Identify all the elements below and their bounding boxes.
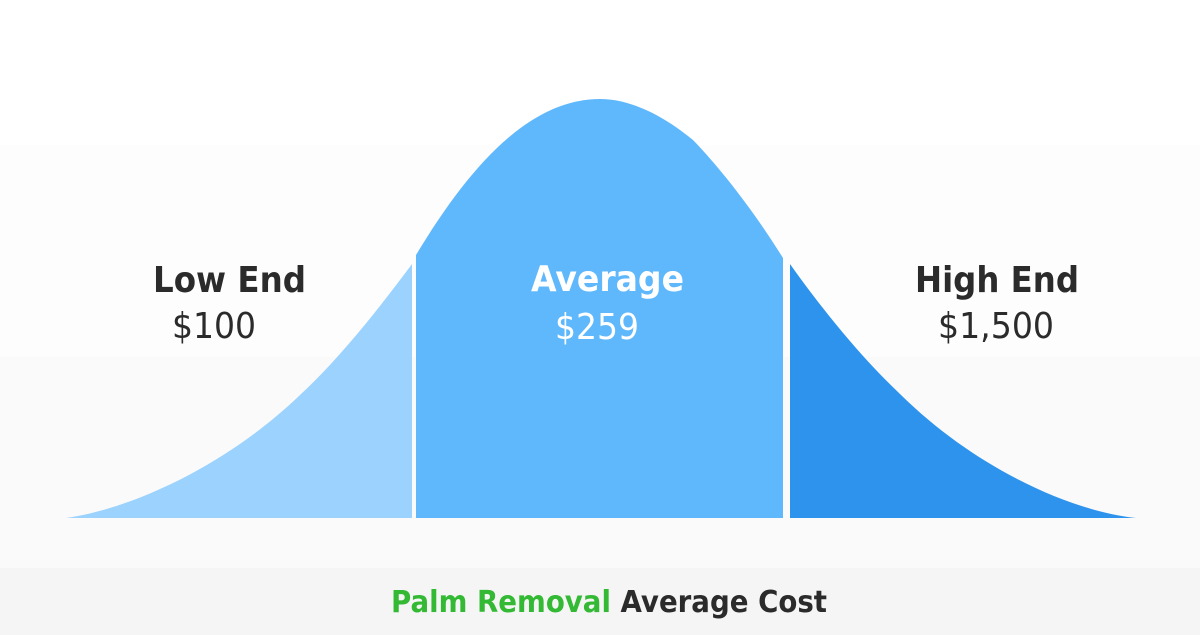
label: average: Average (531, 259, 684, 300)
footer band (0, 568, 1200, 635)
label: low end: $100 (172, 306, 256, 347)
title: Palm Removal Average Cost (391, 585, 827, 620)
label: high end (915, 260, 1079, 347)
label: average: $259 (555, 307, 639, 348)
segment: low end (66, 264, 412, 518)
bell curve chart (66, 99, 1136, 518)
segment: average (416, 99, 783, 518)
label: high end: $1,500 (938, 306, 1054, 347)
label: average (531, 259, 684, 348)
label: low end: Low End (153, 260, 306, 301)
segment: high end (790, 264, 1136, 518)
label: low end (153, 260, 306, 347)
label: high end: High End (915, 260, 1079, 301)
